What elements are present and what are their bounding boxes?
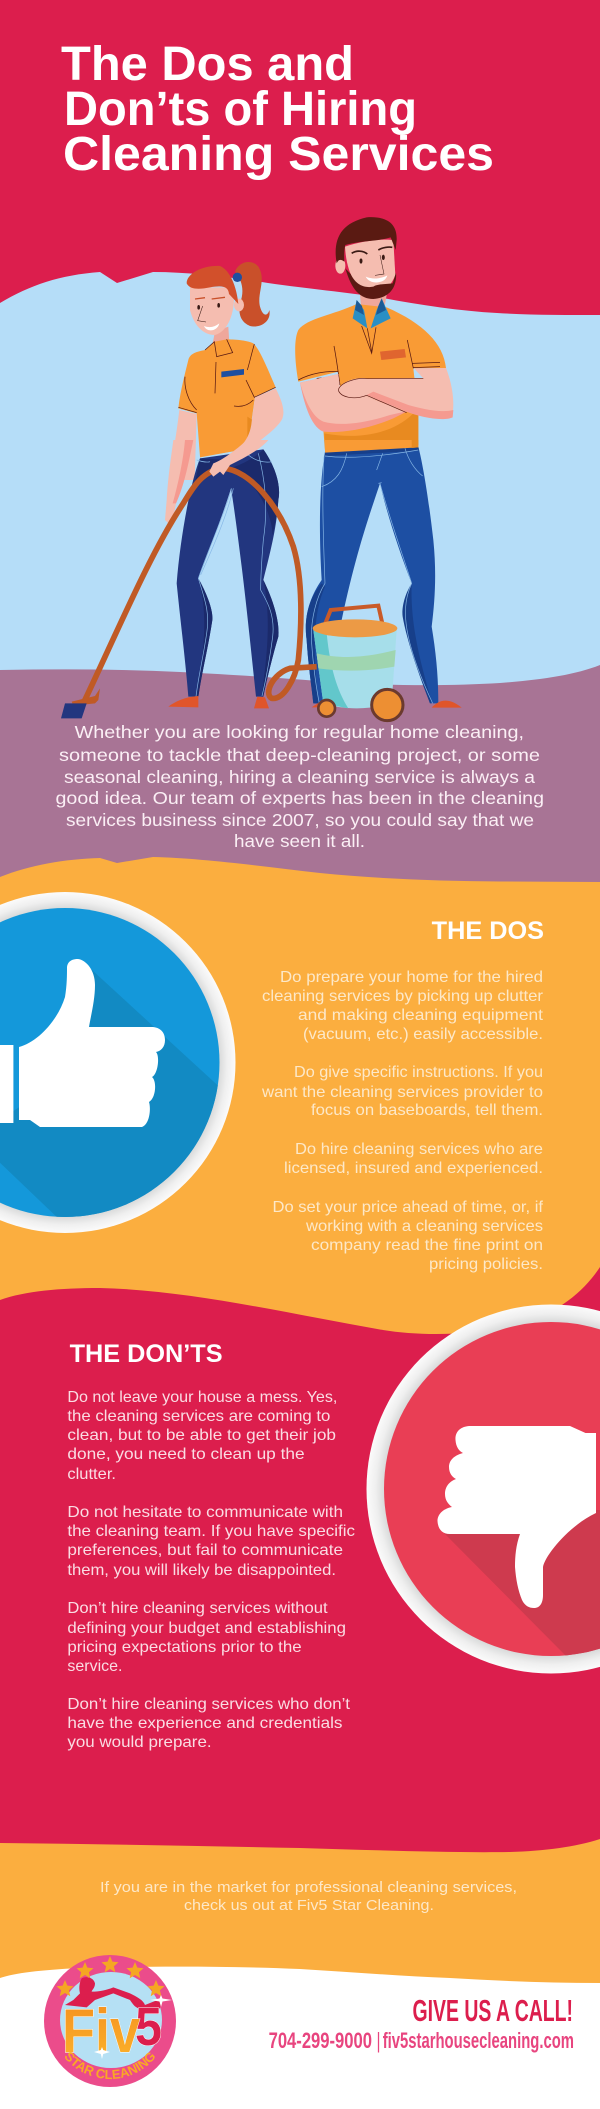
text block: the don'ts list: defining your budget and establishing (67, 1620, 346, 1637)
icon: thumbs up badge (0, 892, 236, 1240)
vacuum head (72, 688, 100, 706)
text block: the don'ts list: clean, but to be able to get their job (67, 1427, 336, 1444)
panel: white footer background (0, 1967, 600, 2109)
title: Cleaning Services (63, 128, 494, 181)
text block: the don'ts list: Don’t hire cleaning services without (67, 1600, 328, 1617)
lower bodies and vacuum (61, 440, 462, 721)
man's jeans (306, 447, 438, 703)
text block: the dos list: cleaning services by picking up clutter (262, 988, 544, 1005)
man's shirt hem (325, 440, 418, 453)
panel: purple intro background (0, 665, 600, 2109)
vacuum hose (83, 468, 317, 703)
text block: the don'ts list: clutter. (67, 1466, 116, 1483)
closing call to action text (100, 1879, 517, 1914)
text block: the don'ts list: done, you need to clean up the (67, 1446, 305, 1463)
man's upper body (295, 217, 453, 451)
title: Don’ts of Hiring (64, 83, 417, 136)
contact details: 704-299-9000 (269, 2028, 372, 2053)
text block: the don'ts list: pricing expectations prior to the (67, 1639, 302, 1656)
intro paragraph: have seen it all. (234, 831, 365, 851)
woman's shoes (168, 696, 198, 707)
text block: the dos list: pricing policies. (429, 1256, 543, 1273)
text block: the dos list: licensed, insured and experienced. (284, 1160, 543, 1177)
intro paragraph (56, 722, 544, 851)
text block: the dos list: Do hire cleaning services who are (295, 1141, 543, 1158)
panel: orange dos background (0, 857, 600, 2109)
heading: the dos: THE DOS (432, 917, 544, 945)
text block: the don'ts list (67, 1389, 355, 1751)
logo: Fiv5 Star Cleaning: STAR CLEANING (65, 2052, 155, 2080)
text block: the dos list: working with a cleaning services (305, 1218, 543, 1235)
woman's arms (165, 440, 193, 527)
contact details: | (376, 2028, 380, 2053)
text block: the don'ts list: the cleaning team. If you have specific (67, 1523, 355, 1540)
text block: the dos list: want the cleaning services provider to (261, 1084, 543, 1101)
intro paragraph: seasonal cleaning, hiring a cleaning service is always a (64, 767, 535, 787)
panel: orange closing background (0, 1839, 600, 2109)
text block: the don'ts list: them, you will likely be disappointed. (67, 1562, 336, 1579)
vacuum body (313, 630, 397, 708)
intro paragraph: services business since 2007, so you could say that we (66, 810, 534, 830)
text block: the don'ts list: service. (67, 1658, 122, 1675)
logo: Fiv5 Star Cleaning (44, 1955, 176, 2087)
text block: the don'ts list: you would prepare. (67, 1734, 212, 1751)
title: The Dos and (61, 38, 354, 91)
woman's shirt hem (200, 440, 240, 457)
logo: Fiv5 Star Cleaning: Fiv (62, 1997, 140, 2066)
text block: the don'ts list: Do not leave your house a mess. Yes, (67, 1389, 337, 1406)
text block: the dos list (261, 969, 544, 1273)
closing call to action text: check us out at Fiv5 Star Cleaning. (184, 1897, 434, 1914)
title (61, 38, 494, 181)
intro paragraph: someone to tackle that deep-cleaning project, or some (59, 745, 540, 765)
intro paragraph: Whether you are looking for regular home cleaning, (75, 722, 524, 742)
panel: crimson don'ts background (0, 1267, 600, 2109)
text block: the don'ts list: Do not hesitate to communicate with (67, 1504, 343, 1521)
text block: the don'ts list: have the experience and credentials (67, 1715, 343, 1732)
logo stars (56, 1956, 164, 1996)
text block: the dos list: Do prepare your home for the hired (280, 969, 543, 986)
text block: the dos list: Do give specific instructions. If you (294, 1064, 543, 1081)
contact details (269, 2028, 574, 2053)
woman's jeans (177, 449, 279, 697)
text block: the don'ts list: preferences, but fail to communicate (67, 1542, 343, 1559)
text block: the don'ts list: Don’t hire cleaning services who don’t (67, 1696, 351, 1713)
man's shoes (432, 701, 462, 708)
logo: Fiv5 Star Cleaning: 5 (135, 1997, 162, 2057)
text block: the dos list: company read the fine print on (311, 1237, 543, 1254)
icon: thumbs down badge (366, 1304, 600, 1700)
intro paragraph: good idea. Our team of experts has been in the cleaning (56, 788, 544, 808)
heading: the don'ts: THE DON’TS (70, 1340, 223, 1368)
text block: the dos list: (vacuum, etc.) easily accessible. (303, 1026, 543, 1043)
text block: the dos list: and making cleaning equipment (298, 1007, 544, 1024)
closing call to action text: If you are in the market for professional cleaning services, (100, 1879, 517, 1896)
text block: the don'ts list: the cleaning services are coming to (67, 1408, 331, 1425)
text block: the dos list: focus on baseboards, tell them. (311, 1102, 543, 1119)
text block: the dos list: Do set your price ahead of time, or, if (272, 1199, 544, 1216)
woman's upper body (170, 262, 283, 480)
illustration: cleaning workers with vacuum (61, 217, 462, 721)
